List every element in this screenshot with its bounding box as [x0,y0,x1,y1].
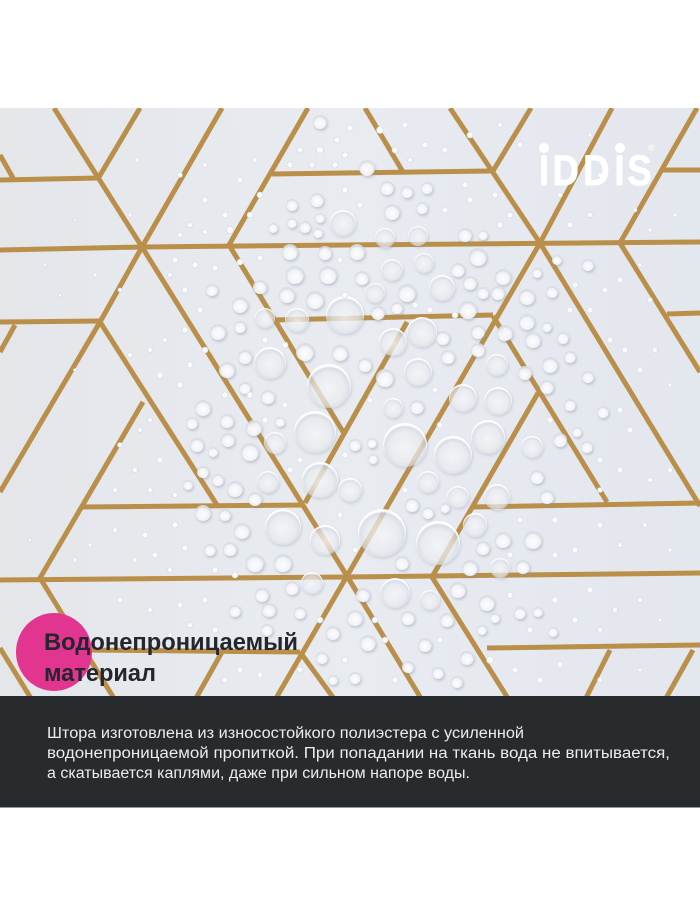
description text [47,725,670,782]
logo dot of first i [539,143,549,153]
description line 1: Штора изготовлена из износостойкого полиэстера с усиленной [47,725,524,742]
description line 2: водонепроницаемой пропиткой. При попадании на ткань вода не впитывается, [47,745,670,762]
medium water droplets [183,115,609,688]
heading line 1: Водонепроницаемый [44,629,298,656]
photo panel: waterproof fabric with gold pattern and droplets [0,108,700,700]
gold geometric pattern [0,108,700,700]
heading line 2: материал [44,660,156,687]
logo dot of second i [615,143,625,153]
description line 3: а скатывается каплями, даже при сильном напоре воды. [47,765,470,782]
logo: IDDIS [539,143,655,195]
logo registered mark: ® [648,143,655,153]
dark description panel [0,696,700,808]
small water droplets [28,122,677,683]
large water droplets [254,210,543,610]
logo wordmark: IDDIS [539,147,652,195]
heading [44,629,298,687]
fabric background [0,108,700,696]
pink accent circle [16,613,92,691]
